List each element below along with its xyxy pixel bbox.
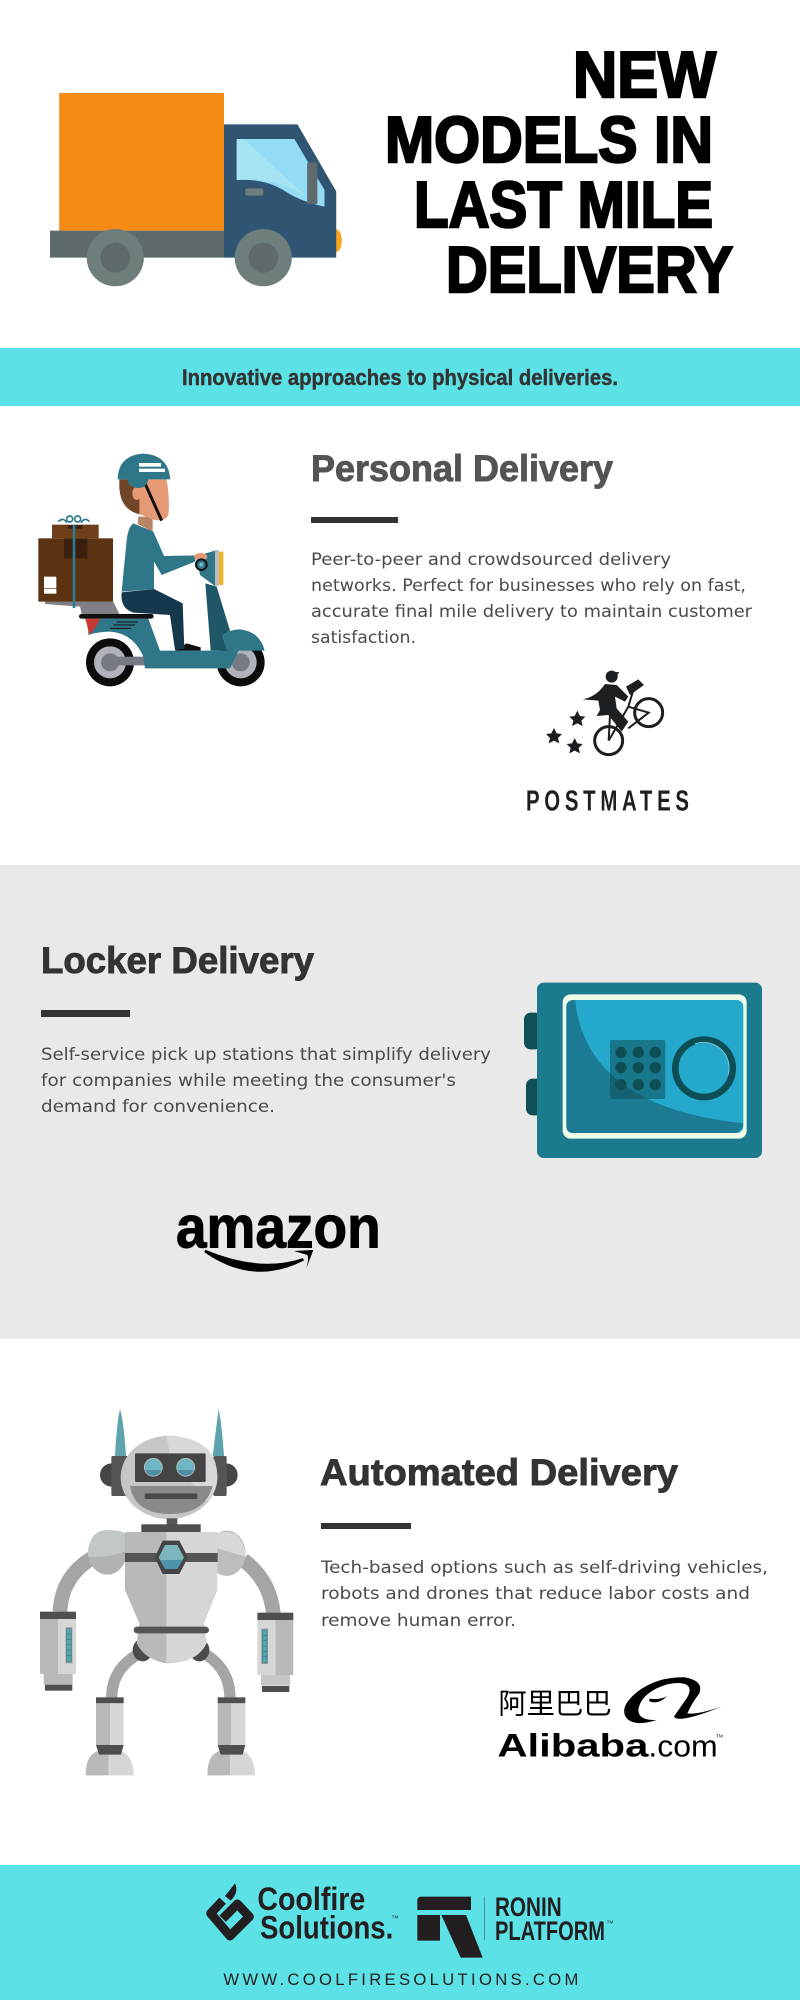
panel: locker delivery	[0, 865, 800, 1339]
panel: automated delivery	[40, 1409, 768, 1775]
text: locker delivery description	[41, 1045, 491, 1117]
subtitle band: Innovative approaches to physical deliveries.	[182, 365, 618, 390]
title: LAST MILE	[414, 168, 713, 241]
text: automated delivery description: robots and drones that reduce labor costs and	[321, 1584, 750, 1604]
title: NEW	[573, 38, 717, 111]
text: website: WWW.COOLFIRESOLUTIONS.COM	[223, 1970, 578, 1989]
logo: coolfire solutions: TM	[392, 1914, 399, 1919]
text: locker delivery description: Self-service pick up stations that simplify delivery	[41, 1045, 491, 1065]
text: locker delivery description: for companies while meeting the consumer's	[41, 1071, 456, 1091]
text: personal delivery description: accurate final mile delivery to maintain customer	[311, 602, 752, 622]
text: automated delivery description	[320, 1558, 768, 1631]
logo: postmates: POSTMATES	[526, 787, 694, 818]
panel: footer	[0, 1865, 800, 2000]
heading: automated delivery: Automated Delivery	[320, 1451, 678, 1493]
text: locker delivery description: demand for convenience.	[41, 1097, 275, 1117]
logo: coolfire solutions: Solutions.	[260, 1909, 393, 1945]
title	[385, 38, 733, 306]
text: personal delivery description: networks. Perfect for businesses who rely on fast,	[311, 576, 746, 596]
title: DELIVERY	[446, 233, 733, 306]
logo: alibaba: Alibaba	[497, 1728, 649, 1764]
logo: amazon: amazon	[176, 1193, 381, 1260]
icon: delivery truck	[50, 93, 342, 286]
text: personal delivery description	[311, 550, 752, 648]
text: personal delivery description: satisfaction.	[311, 628, 416, 648]
heading: personal delivery: Personal Delivery	[311, 447, 613, 489]
logo: alibaba: .com	[648, 1730, 718, 1764]
logo: coolfire solutions: Coolfire	[257, 1881, 365, 1917]
text: automated delivery description: Tech-based options such as self-driving vehicles,	[320, 1558, 768, 1578]
logo: alibaba	[497, 1677, 723, 1764]
heading: locker delivery: Locker Delivery	[41, 939, 314, 981]
logo: alibaba: 阿里巴巴	[498, 1688, 612, 1720]
icon: robot	[40, 1409, 293, 1775]
logo: alibaba: TM	[716, 1733, 723, 1738]
logo: postmates	[526, 671, 694, 818]
icon: safe locker	[524, 983, 762, 1158]
text: personal delivery description: Peer-to-peer and crowdsourced delivery	[311, 550, 671, 570]
logo: coolfire solutions	[211, 1881, 399, 1945]
logo: ronin platform: PLATFORM	[495, 1916, 605, 1946]
logo: ronin platform: RONIN	[495, 1892, 562, 1922]
icon: scooter courier	[38, 454, 265, 686]
logo: ronin platform: TM	[607, 1919, 614, 1924]
subtitle band	[0, 348, 800, 406]
panel: personal delivery	[38, 447, 752, 818]
text: automated delivery description: remove human error.	[321, 1611, 516, 1631]
title: MODELS IN	[385, 103, 713, 176]
logo: ronin platform	[417, 1892, 614, 1958]
